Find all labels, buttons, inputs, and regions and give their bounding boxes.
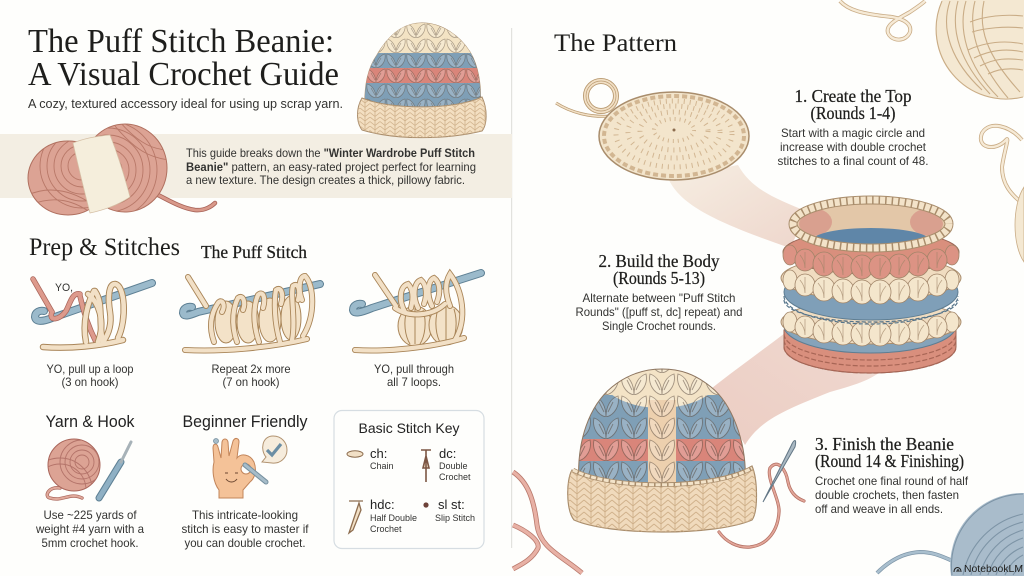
title bbox=[28, 23, 339, 93]
icon: hand with hook and checkmark bbox=[213, 436, 287, 498]
step 3 description: Crochet one final round of half bbox=[815, 474, 969, 488]
illustration: hat body cylinder bbox=[781, 199, 961, 373]
step 2 description: Single Crochet rounds. bbox=[602, 319, 716, 333]
step 2 caption: (7 on hook) bbox=[222, 375, 280, 389]
step 2 description bbox=[576, 291, 742, 333]
step 3 heading: (Round 14 & Finishing) bbox=[815, 451, 964, 472]
step 3 caption bbox=[374, 362, 454, 389]
step 2 heading: (Rounds 5-13) bbox=[613, 268, 705, 288]
beginner caption: This intricate-looking bbox=[192, 508, 298, 522]
step 2 heading: 2. Build the Body bbox=[598, 251, 720, 271]
key: chain: ch: bbox=[370, 446, 387, 461]
step 3 heading: 3. Finish the Beanie bbox=[815, 434, 954, 454]
key: double crochet bbox=[421, 446, 471, 482]
decoration: cream yarn ball top right bbox=[840, 0, 1024, 262]
key: slip stitch: sl st: bbox=[438, 497, 465, 512]
key: double crochet: Crochet bbox=[439, 472, 471, 482]
step 3 description: off and weave in all ends. bbox=[815, 502, 943, 516]
step 2 caption: Repeat 2x more bbox=[212, 362, 291, 376]
beginner caption: stitch is easy to master if bbox=[182, 522, 309, 536]
step 1 caption bbox=[46, 362, 134, 389]
step 1 heading: (Rounds 1-4) bbox=[810, 103, 896, 123]
step 1 description: Start with a magic circle and bbox=[781, 126, 925, 140]
step 1 illustration: yarn over bbox=[33, 279, 152, 348]
step 1 description bbox=[778, 126, 928, 168]
key: chain bbox=[347, 446, 394, 471]
step 3 caption: all 7 loops. bbox=[387, 375, 441, 389]
step 3 illustration: pull through bbox=[353, 273, 481, 350]
intro text bbox=[186, 146, 476, 187]
step 3 description bbox=[815, 474, 969, 516]
panel: basic stitch key: Basic Stitch Key bbox=[358, 420, 460, 436]
yarn caption: weight #4 yarn with a bbox=[35, 522, 144, 536]
yarn caption: 5mm crochet hook. bbox=[42, 536, 138, 550]
step 2 caption bbox=[212, 362, 291, 389]
step 1 illustration: yarn over: YO, bbox=[55, 282, 73, 294]
step 1 description: stitches to a final count of 48. bbox=[778, 154, 928, 168]
heading: prep and stitches: Prep & Stitches bbox=[29, 234, 180, 261]
title: A Visual Crochet Guide bbox=[28, 56, 339, 93]
icon: striped beanie bbox=[358, 20, 486, 138]
title: The Puff Stitch Beanie: bbox=[28, 23, 334, 60]
heading: beginner friendly: Beginner Friendly bbox=[182, 413, 308, 431]
connector: disc to body bbox=[668, 165, 808, 248]
connector: body to finished beanie bbox=[712, 333, 880, 445]
illustration: finished beanie bbox=[567, 368, 758, 533]
panel: intro band bbox=[0, 134, 512, 198]
icon: needle and thread bbox=[719, 440, 804, 547]
key: half double crochet bbox=[349, 497, 417, 534]
key: half double crochet: Crochet bbox=[370, 524, 402, 534]
step 3 caption: YO, pull through bbox=[374, 362, 454, 376]
subtitle: A cozy, textured accessory ideal for using up scrap yarn. bbox=[28, 96, 343, 111]
decoration: pink yarn strands bbox=[513, 472, 582, 573]
step 2 description: Rounds" ([puff st, dc] repeat) and bbox=[576, 305, 742, 319]
beginner caption: you can double crochet. bbox=[184, 536, 306, 550]
key: half double crochet: hdc: bbox=[370, 497, 395, 512]
icon: pink yarn skein bbox=[28, 121, 215, 219]
step 1 caption: YO, pull up a loop bbox=[46, 362, 134, 376]
key: slip stitch bbox=[423, 497, 475, 523]
key: chain: Chain bbox=[370, 461, 394, 471]
heading: yarn and hook: Yarn & Hook bbox=[46, 413, 135, 431]
yarn caption bbox=[35, 508, 144, 550]
step 3 heading bbox=[815, 434, 964, 472]
key: slip stitch: Slip Stitch bbox=[435, 513, 475, 523]
key: double crochet: Double bbox=[439, 461, 468, 471]
illustration: disc top of hat bbox=[556, 81, 749, 180]
watermark: NotebookLM: NotebookLM bbox=[964, 563, 1023, 575]
heading: the puff stitch: The Puff Stitch bbox=[201, 242, 307, 262]
step 2 description: Alternate between "Puff Stitch bbox=[582, 291, 736, 305]
intro text: This guide breaks down the "Winter Wardrobe Puff Stitch bbox=[186, 146, 475, 160]
step 1 heading: 1. Create the Top bbox=[794, 86, 912, 106]
icon: yarn ball and hook bbox=[46, 438, 132, 502]
heading: the pattern: The Pattern bbox=[554, 30, 678, 57]
step 2 heading bbox=[598, 251, 720, 288]
decoration: blue yarn ball bottom right bbox=[877, 493, 1024, 576]
step 1 heading bbox=[794, 86, 912, 123]
yarn caption: Use ~225 yards of bbox=[44, 508, 137, 522]
intro text: Beanie" pattern, an easy-rated project perfect for learning bbox=[186, 160, 476, 174]
panel: basic stitch key bbox=[334, 410, 484, 548]
step 3 description: double crochets, then fasten bbox=[815, 488, 959, 502]
key: half double crochet: Half Double bbox=[370, 513, 417, 523]
intro text: a new texture. The design creates a thick, pillowy fabric. bbox=[186, 173, 465, 187]
step 2 illustration: repeat loops bbox=[183, 276, 320, 351]
key: double crochet: dc: bbox=[439, 446, 456, 461]
centre divider bbox=[511, 28, 512, 548]
beginner caption bbox=[182, 508, 309, 550]
step 1 caption: (3 on hook) bbox=[62, 375, 119, 389]
step 1 description: increase with double crochet bbox=[780, 140, 927, 154]
